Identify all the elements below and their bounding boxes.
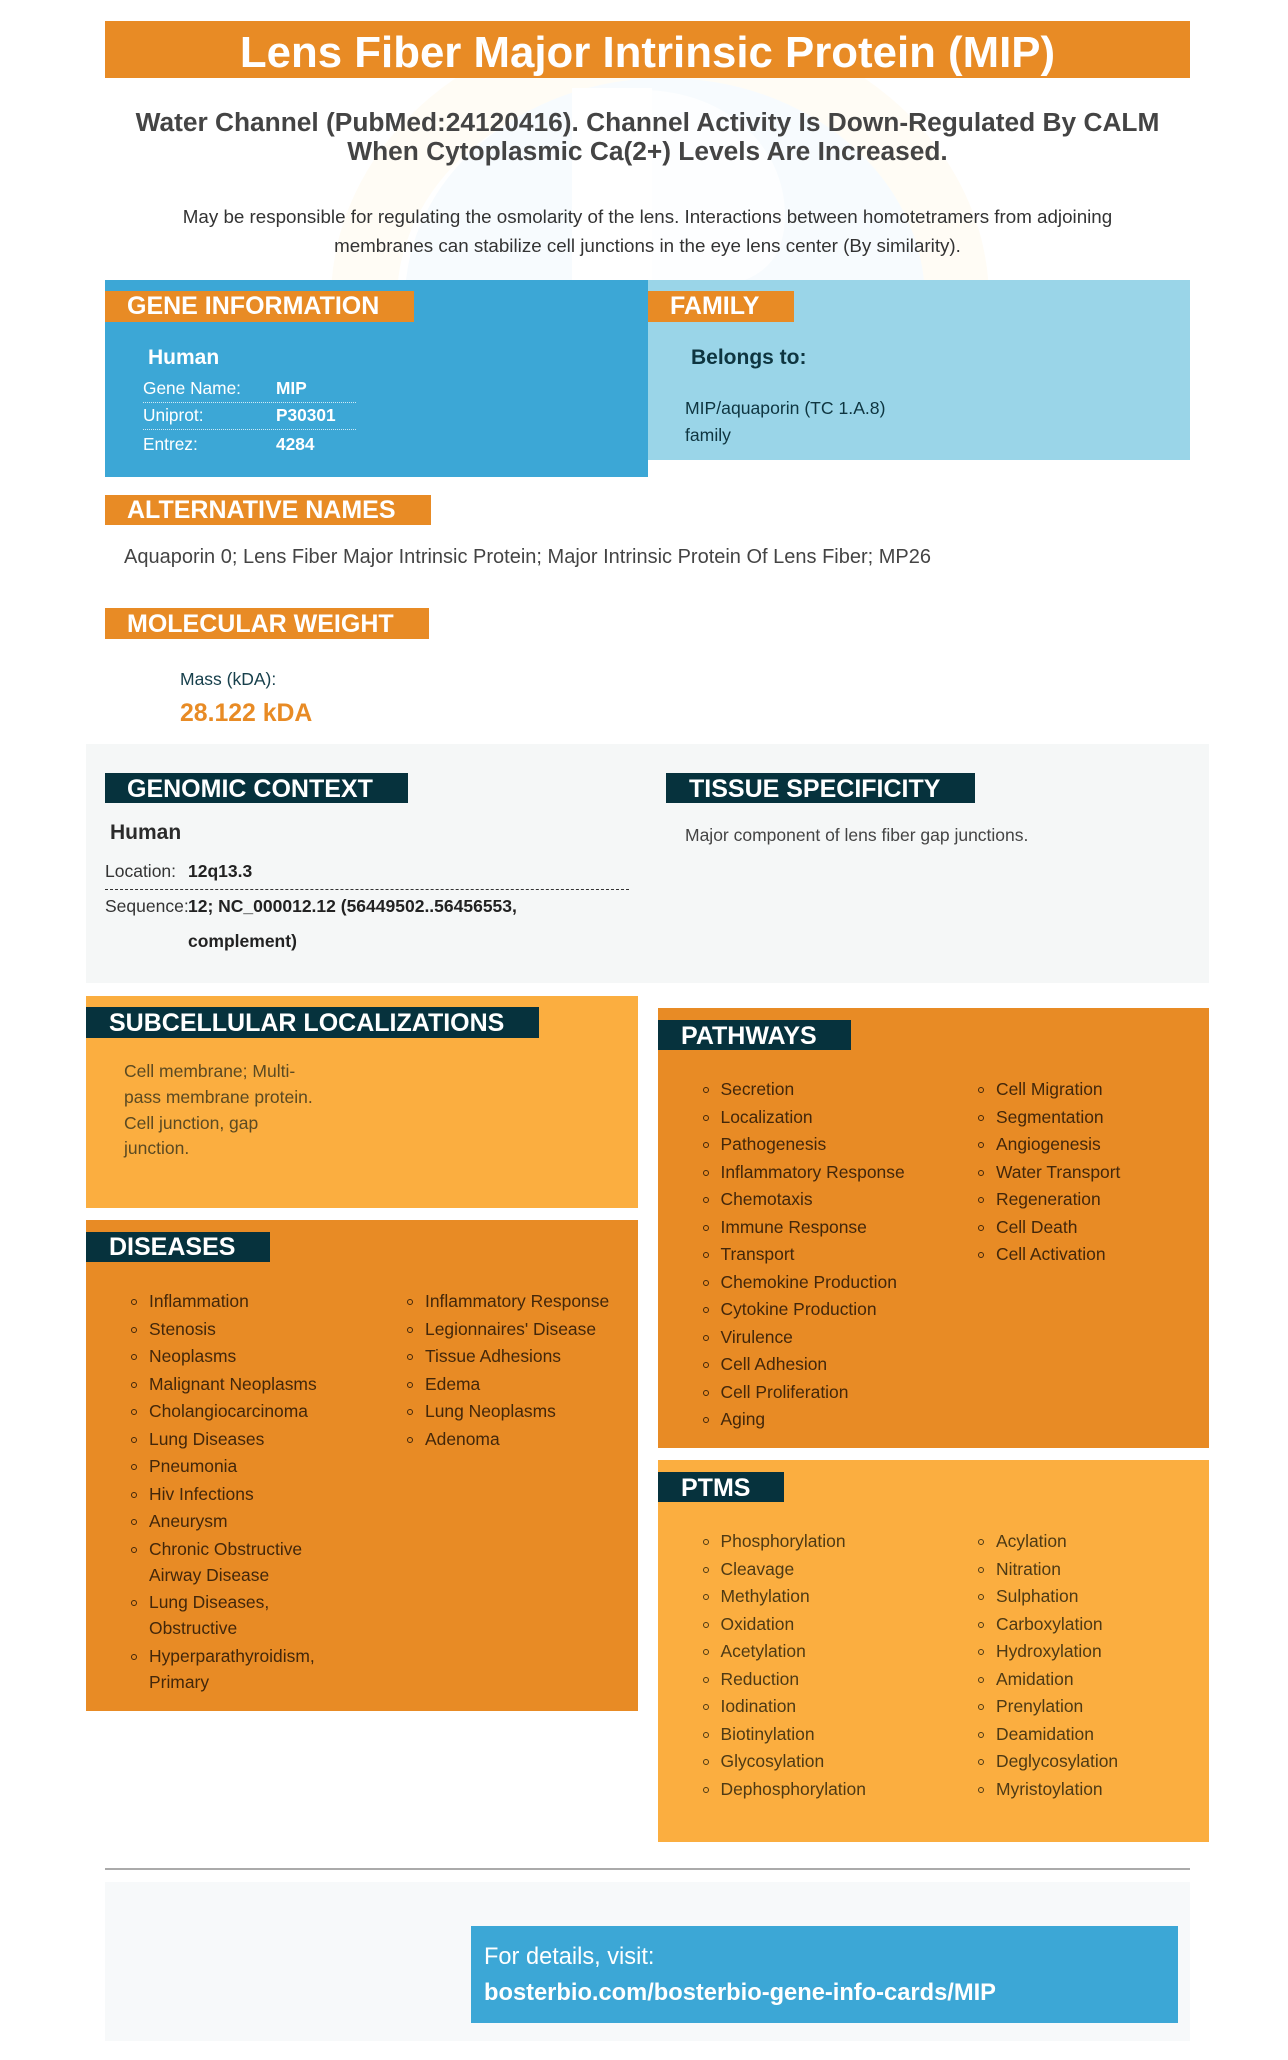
title banner bbox=[105, 21, 1190, 78]
row: sequence bbox=[105, 896, 517, 951]
list: pathways column 1: Transport bbox=[720, 1244, 794, 1264]
subcellular text: Cell membrane; Multi- bbox=[124, 1061, 295, 1081]
heading: pathways bbox=[658, 1020, 851, 1050]
list: pathways column 1: Aging bbox=[720, 1409, 765, 1429]
row: entrez bbox=[143, 434, 314, 454]
row: uniprot: P30301 bbox=[276, 405, 336, 425]
list: diseases column 1: Lung Diseases, bbox=[149, 1592, 269, 1612]
list: pathways column 2: Regeneration bbox=[996, 1189, 1101, 1209]
description paragraph bbox=[183, 206, 1112, 256]
heading: family bbox=[648, 291, 794, 322]
heading: tissue specificity: TISSUE SPECIFICITY bbox=[689, 775, 940, 803]
list: ptms column 2: Prenylation bbox=[996, 1696, 1083, 1716]
list: diseases column 1: Inflammation bbox=[149, 1291, 249, 1311]
heading: ptms bbox=[658, 1472, 784, 1502]
mass label: Mass (kDA): bbox=[180, 669, 276, 689]
list: pathways column 2: Water Transport bbox=[996, 1162, 1120, 1182]
row: uniprot bbox=[143, 407, 356, 430]
list: pathways column 1: Cell Adhesion bbox=[720, 1354, 827, 1374]
list: diseases column 1: Stenosis bbox=[149, 1318, 216, 1338]
list: pathways column 1: Cell Proliferation bbox=[720, 1382, 848, 1402]
list: diseases column 2: Tissue Adhesions bbox=[425, 1346, 561, 1366]
list: diseases column 1: Hyperparathyroidism, bbox=[149, 1646, 315, 1666]
list: diseases column 2: Inflammatory Response bbox=[425, 1291, 609, 1311]
list: ptms column 1: Methylation bbox=[720, 1586, 810, 1606]
heading: molecular weight: MOLECULAR WEIGHT bbox=[127, 610, 394, 638]
heading: genomic context: GENOMIC CONTEXT bbox=[127, 775, 373, 803]
subcellular text bbox=[124, 1061, 313, 1158]
list: pathways column 1: Chemotaxis bbox=[720, 1189, 813, 1209]
row: gene name: MIP bbox=[276, 378, 307, 398]
row: uniprot: Uniprot: bbox=[143, 405, 204, 425]
row: location: 12q13.3 bbox=[188, 861, 252, 881]
list: diseases column 1: Chronic Obstructive bbox=[149, 1538, 302, 1558]
list: ptms column 2: Deglycosylation bbox=[996, 1751, 1118, 1771]
row: gene name bbox=[143, 380, 356, 403]
list: ptms column 2: Hydroxylation bbox=[996, 1641, 1102, 1661]
heading: ptms: PTMS bbox=[681, 1474, 750, 1502]
title banner: Lens Fiber Major Intrinsic Protein (MIP) bbox=[240, 28, 1055, 77]
list: pathways column 1: Cytokine Production bbox=[720, 1299, 877, 1319]
subtitle bbox=[136, 107, 1159, 166]
subcellular text: Cell junction, gap bbox=[124, 1113, 258, 1133]
list: diseases column 1: Airway Disease bbox=[149, 1564, 269, 1584]
list: pathways column 1: Immune Response bbox=[720, 1216, 867, 1236]
list: diseases column 1: Obstructive bbox=[149, 1618, 237, 1638]
subcellular text: junction. bbox=[124, 1138, 189, 1158]
list: pathways column 1: Virulence bbox=[720, 1326, 793, 1346]
list: ptms column 1: Reduction bbox=[720, 1668, 799, 1688]
list: diseases column 1: Pneumonia bbox=[149, 1456, 237, 1476]
list: pathways column 1: Secretion bbox=[720, 1079, 794, 1099]
belongs to label: Belongs to: bbox=[691, 346, 806, 369]
list: pathways column 1: Pathogenesis bbox=[720, 1134, 826, 1154]
list: diseases column 1: Cholangiocarcinoma bbox=[149, 1401, 308, 1421]
list: diseases column 1: Aneurysm bbox=[149, 1511, 228, 1531]
list: ptms column 1: Phosphorylation bbox=[720, 1531, 846, 1551]
list: diseases column 2: Lung Neoplasms bbox=[425, 1401, 556, 1421]
description paragraph: membranes can stabilize cell junctions in the eye lens center (By similarity). bbox=[334, 235, 961, 256]
list: ptms column 2: Myristoylation bbox=[996, 1778, 1103, 1798]
row: gene name: Gene Name: bbox=[143, 378, 241, 398]
list: diseases column 2: Adenoma bbox=[425, 1428, 500, 1448]
list: ptms column 2: Amidation bbox=[996, 1668, 1074, 1688]
heading: family: FAMILY bbox=[670, 292, 759, 320]
row: sequence: Sequence: bbox=[105, 896, 189, 916]
heading: subcellular localizations: SUBCELLULAR LOCALIZATIONS bbox=[109, 1009, 504, 1037]
list: pathways column 2: Cell Death bbox=[996, 1216, 1077, 1236]
alternative names text: Aquaporin 0; Lens Fiber Major Intrinsic Protein; Major Intrinsic Protein Of Lens Fiber; MP26 bbox=[124, 546, 931, 568]
subtitle: Water Channel (PubMed:24120416). Channel Activity Is Down-Regulated By CALM bbox=[136, 107, 1159, 137]
list: ptms column 2: Carboxylation bbox=[996, 1614, 1103, 1634]
list: pathways column 1 bbox=[703, 1079, 905, 1429]
list: ptms column 2: Acylation bbox=[996, 1531, 1067, 1551]
list: pathways column 2: Segmentation bbox=[996, 1106, 1104, 1126]
species label: Human bbox=[110, 821, 181, 844]
list: ptms column 2: Deamidation bbox=[996, 1724, 1094, 1744]
details label: For details, visit: bbox=[484, 1944, 654, 1970]
species label: Human bbox=[148, 346, 219, 369]
list: pathways column 2 bbox=[978, 1079, 1120, 1264]
subtitle: When Cytoplasmic Ca(2+) Levels Are Increased. bbox=[347, 136, 948, 166]
list: ptms column 2: Sulphation bbox=[996, 1586, 1078, 1606]
heading: diseases bbox=[86, 1232, 270, 1262]
list: ptms column 1: Acetylation bbox=[720, 1641, 806, 1661]
tissue specificity text: Major component of lens fiber gap junctions. bbox=[685, 825, 1028, 845]
list: ptms column 1: Dephosphorylation bbox=[720, 1778, 866, 1798]
list: pathways column 2: Cell Migration bbox=[996, 1079, 1103, 1099]
list: ptms column 2 bbox=[978, 1531, 1118, 1798]
panel: family bbox=[648, 280, 1190, 460]
list: pathways column 2: Cell Activation bbox=[996, 1244, 1106, 1264]
panel: gene information bbox=[105, 280, 648, 477]
list: pathways column 1: Chemokine Production bbox=[720, 1272, 897, 1292]
list: diseases column 2: Legionnaires' Disease bbox=[425, 1318, 596, 1338]
heading: pathways: PATHWAYS bbox=[681, 1022, 817, 1050]
list: diseases column 1 bbox=[131, 1291, 317, 1692]
list: diseases column 1: Neoplasms bbox=[149, 1346, 236, 1366]
list: ptms column 1: Glycosylation bbox=[720, 1751, 824, 1771]
list: ptms column 1: Cleavage bbox=[720, 1558, 794, 1578]
details url: bosterbio.com/bosterbio-gene-info-cards/MIP bbox=[484, 1980, 996, 2006]
list: pathways column 1: Inflammatory Response bbox=[720, 1162, 905, 1182]
heading: diseases: DISEASES bbox=[109, 1233, 235, 1261]
heading: alternative names: ALTERNATIVE NAMES bbox=[127, 496, 396, 524]
row: sequence: 12; NC_000012.12 (56449502..56456553, bbox=[188, 896, 517, 916]
mass value: 28.122 kDA bbox=[180, 700, 312, 727]
list: ptms column 1 bbox=[703, 1531, 866, 1798]
list: ptms column 1: Iodination bbox=[720, 1696, 796, 1716]
row: location bbox=[105, 863, 629, 890]
list: diseases column 1: Lung Diseases bbox=[149, 1428, 264, 1448]
callout: details link bbox=[471, 1926, 1178, 2022]
panel: subcellular localizations bbox=[86, 996, 638, 1208]
heading: gene information: GENE INFORMATION bbox=[127, 292, 379, 320]
row: entrez: Entrez: bbox=[143, 434, 198, 454]
list: ptms column 1: Oxidation bbox=[720, 1614, 794, 1634]
row: location: Location: bbox=[105, 861, 176, 881]
family text: family bbox=[685, 425, 731, 445]
list: pathways column 2: Angiogenesis bbox=[996, 1134, 1101, 1154]
panel: ptms bbox=[658, 1460, 1209, 1842]
list: ptms column 1: Biotinylation bbox=[720, 1724, 815, 1744]
list: diseases column 2: Edema bbox=[425, 1374, 480, 1394]
subcellular text: pass membrane protein. bbox=[124, 1087, 313, 1107]
list: diseases column 1: Malignant Neoplasms bbox=[149, 1374, 317, 1394]
panel: genomic context and tissue specificity: complement) bbox=[188, 931, 297, 951]
list: pathways column 1: Localization bbox=[720, 1106, 813, 1126]
list: diseases column 2 bbox=[407, 1291, 609, 1448]
list: ptms column 2: Nitration bbox=[996, 1558, 1061, 1578]
list: diseases column 1: Hiv Infections bbox=[149, 1484, 254, 1504]
family text bbox=[685, 398, 885, 445]
panel: pathways bbox=[658, 1008, 1209, 1448]
description paragraph: May be responsible for regulating the osmolarity of the lens. Interactions between homotetramers from adjoining bbox=[183, 206, 1112, 227]
family text: MIP/aquaporin (TC 1.A.8) bbox=[685, 398, 885, 418]
panel: diseases bbox=[86, 1220, 638, 1711]
background watermark logo bbox=[332, 78, 988, 280]
panel: footer bbox=[105, 1882, 1190, 2040]
panel: genomic context and tissue specificity bbox=[86, 744, 1209, 983]
row: entrez: 4284 bbox=[276, 434, 314, 454]
list: diseases column 1: Primary bbox=[149, 1672, 209, 1692]
